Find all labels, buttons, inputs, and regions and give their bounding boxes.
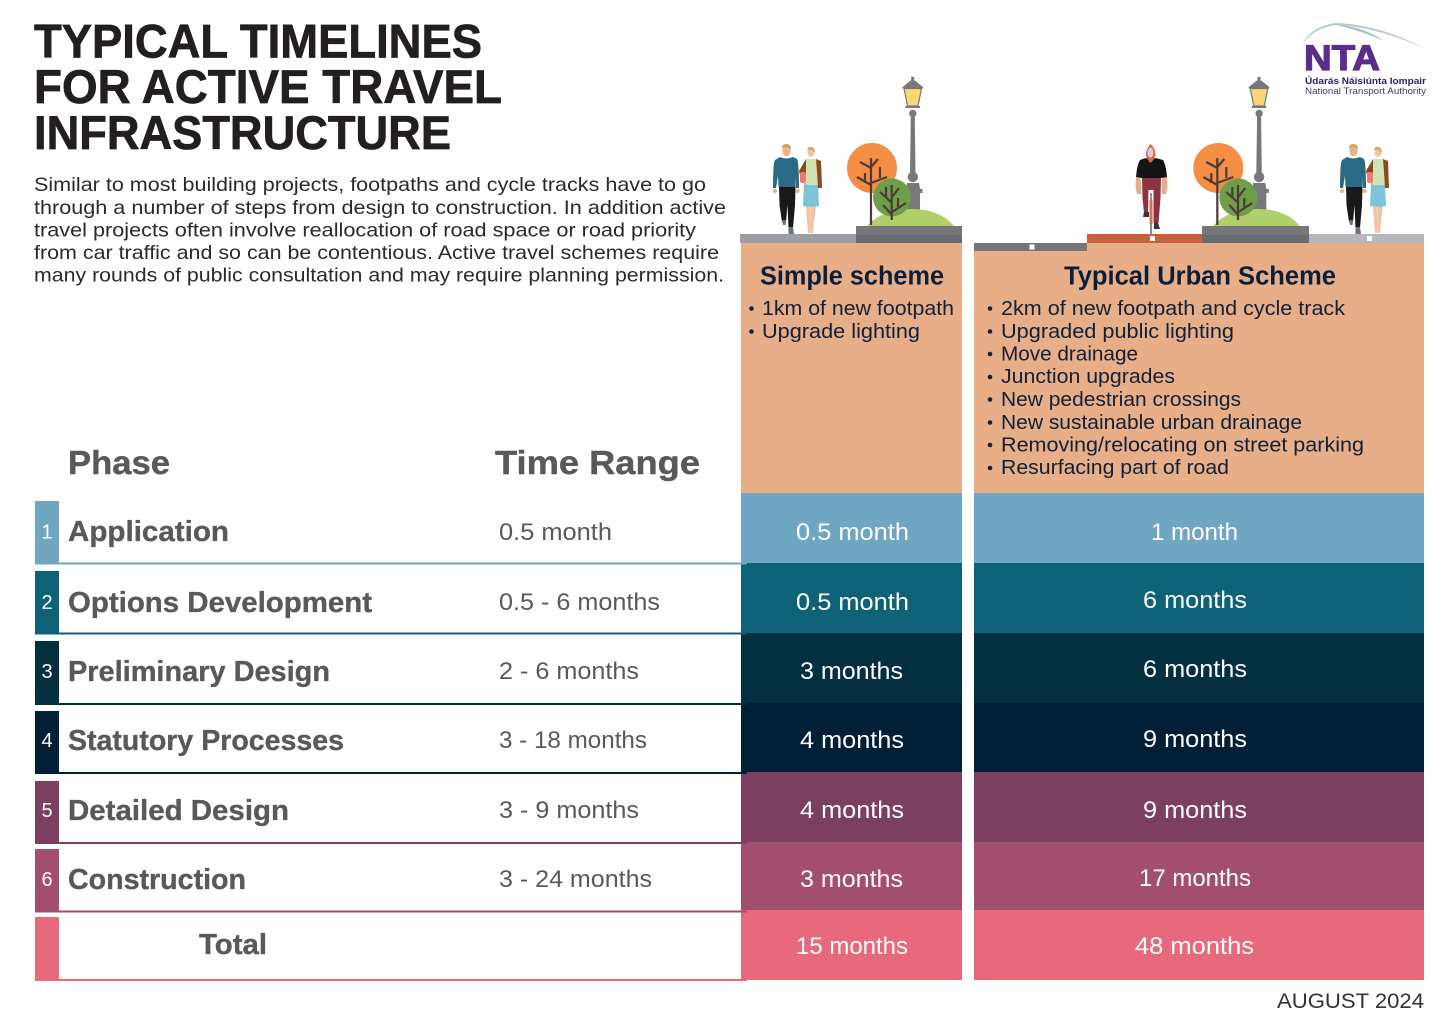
intro text block: through a number of steps from design to construction. In addition active (34, 197, 726, 219)
heading: typical urban scheme: Typical Urban Scheme (1064, 262, 1336, 290)
row 1: application: 0.5 month (499, 519, 612, 546)
column: simple scheme durations: 0.5 month (796, 519, 909, 546)
intro text block: many rounds of public consultation and may require planning permission. (34, 264, 724, 286)
row 2: options development: Options Development (68, 587, 373, 619)
icon: walking couple (773, 144, 822, 234)
logo: NTA: NTA (1304, 39, 1380, 78)
heading: simple scheme: Simple scheme (760, 262, 944, 290)
date: AUGUST 2024 (1277, 990, 1424, 1013)
column: simple scheme durations: 4 months (800, 797, 904, 824)
row 4: statutory processes: 4 (41, 730, 53, 752)
illustration: simple scheme street (740, 77, 962, 243)
title (34, 15, 502, 159)
row: total: Total (199, 929, 267, 961)
row 4: statutory processes: 3 - 18 months (499, 727, 647, 754)
list: urban scheme scope: Move drainage (1001, 342, 1138, 366)
row 2: options development (35, 571, 747, 634)
intro text block: travel projects often involve reallocation of road space or road priority (34, 220, 696, 242)
row 2: options development: 0.5 - 6 months (499, 589, 660, 616)
column: simple scheme durations: 4 months (800, 727, 904, 754)
icon: footpath (740, 234, 856, 243)
row 4: statutory processes (35, 711, 747, 774)
column: urban scheme durations: 9 months (1143, 797, 1247, 824)
logo: NTA: Údarás Náisiúnta Iompair (1305, 75, 1426, 87)
illustration: urban scheme street (974, 77, 1424, 251)
list: simple scheme scope (749, 297, 954, 343)
row 2: options development: 2 (41, 592, 53, 614)
title: INFRASTRUCTURE (34, 106, 451, 159)
icon: planter (1202, 226, 1309, 243)
row 5: detailed design: 5 (41, 800, 53, 822)
row 5: detailed design: 3 - 9 months (499, 797, 639, 824)
title: TYPICAL TIMELINES (34, 15, 482, 68)
icon: road (974, 243, 1087, 251)
row 1: application (35, 501, 747, 564)
column: urban scheme durations: 6 months (1143, 656, 1247, 683)
icon: green tree (873, 178, 911, 220)
column: urban scheme durations: 48 months (1135, 933, 1254, 960)
list: urban scheme scope: Upgraded public lighting (1001, 320, 1234, 343)
list: urban scheme scope: Removing/relocating on street parking (1001, 434, 1364, 456)
list: urban scheme scope: Junction upgrades (1001, 365, 1175, 388)
icon: orange tree (1193, 143, 1243, 225)
row 1: application: Application (68, 516, 229, 548)
column: urban scheme durations: 17 months (1139, 865, 1251, 892)
table header: Phase (68, 444, 170, 481)
icon: cyclist (1136, 144, 1168, 234)
icon: lamp post (902, 77, 923, 210)
column: simple scheme durations: 3 months (800, 866, 903, 893)
list: urban scheme scope: New sustainable urban drainage (1001, 411, 1302, 434)
title: FOR ACTIVE TRAVEL (34, 60, 502, 113)
table header: Time Range (495, 444, 700, 481)
icon: lamp post (1249, 77, 1269, 210)
row 6: construction: 6 (41, 869, 53, 891)
icon: hill (1213, 209, 1300, 226)
column: urban scheme durations: 6 months (1143, 587, 1247, 614)
column: simple scheme durations: 3 months (800, 658, 903, 685)
column: simple scheme durations (741, 493, 962, 980)
list: urban scheme scope: Resurfacing part of road (1001, 456, 1229, 479)
column: urban scheme durations (974, 493, 1424, 980)
column: urban scheme durations: 1 month (1151, 519, 1238, 546)
row 6: construction: Construction (68, 864, 246, 896)
icon: green tree (1219, 178, 1257, 220)
table header (68, 444, 700, 481)
list: urban scheme scope: New pedestrian crossings (1001, 388, 1241, 411)
column: simple scheme durations: 15 months (796, 933, 908, 960)
icon: cycle track (1087, 234, 1202, 243)
row 3: preliminary design (35, 641, 747, 705)
row 6: construction (35, 849, 747, 912)
row 3: preliminary design: 3 (41, 661, 53, 683)
row 4: statutory processes: Statutory Processes (68, 725, 344, 757)
intro text block: from car traffic and so can be contentious. Active travel schemes require (34, 242, 719, 264)
row 1: application: 1 (41, 522, 53, 544)
column: simple scheme durations: 0.5 month (796, 589, 909, 616)
list: urban scheme scope: 2km of new footpath and cycle track (1001, 297, 1346, 320)
list: urban scheme scope (988, 297, 1364, 479)
row 3: preliminary design: Preliminary Design (68, 656, 330, 688)
row 5: detailed design: Detailed Design (68, 795, 289, 827)
icon: orange tree (847, 143, 897, 225)
intro text block: Similar to most building projects, footpaths and cycle tracks have to go (34, 174, 706, 196)
icon: hill (867, 209, 954, 226)
icon: footpath (1309, 234, 1424, 243)
panel: typical urban scheme description (974, 243, 1424, 493)
row 5: detailed design (35, 781, 747, 844)
logo: NTA (1302, 23, 1427, 97)
row: total (35, 917, 747, 981)
logo: NTA: National Transport Authority (1305, 86, 1426, 97)
list: simple scheme scope: Upgrade lighting (762, 320, 920, 343)
intro text block (34, 174, 726, 286)
row 3: preliminary design: 2 - 6 months (499, 658, 639, 685)
column: urban scheme durations: 9 months (1143, 726, 1247, 753)
icon: walking couple (1340, 144, 1389, 234)
panel: simple scheme description (741, 243, 962, 493)
row 6: construction: 3 - 24 months (499, 866, 652, 893)
icon: planter (856, 226, 962, 243)
list: simple scheme scope: 1km of new footpath (762, 297, 954, 320)
